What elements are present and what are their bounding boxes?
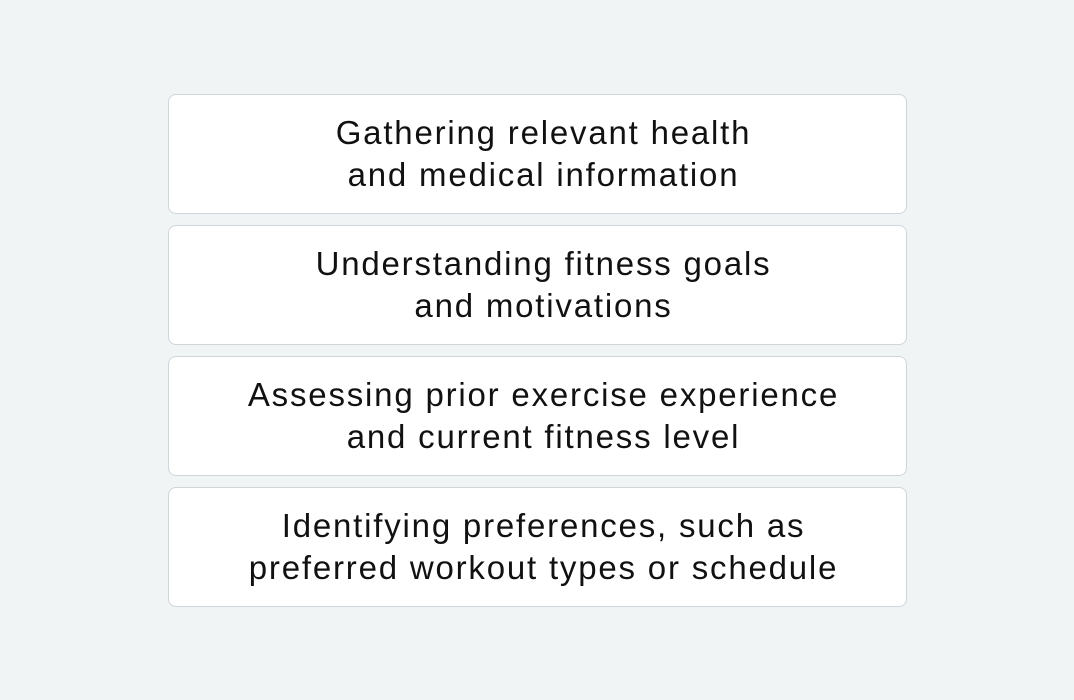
panel: preferences: preferred workout types or schedule [249,549,838,586]
panel: preferences [168,487,907,607]
panel: health info: and medical information [348,156,739,193]
panel: exercise experience: and current fitness level [347,418,740,455]
panel: preferences: Identifying preferences, such as [282,507,805,544]
panel: fitness goals: and motivations [414,287,673,324]
panel: fitness goals [168,225,907,345]
panel: fitness goals: Understanding fitness goals [316,245,771,282]
panel: health info: Gathering relevant health [336,114,751,151]
panel: exercise experience: Assessing prior exercise experience [248,376,839,413]
panel: exercise experience [168,356,907,476]
panel: health info [168,94,907,214]
